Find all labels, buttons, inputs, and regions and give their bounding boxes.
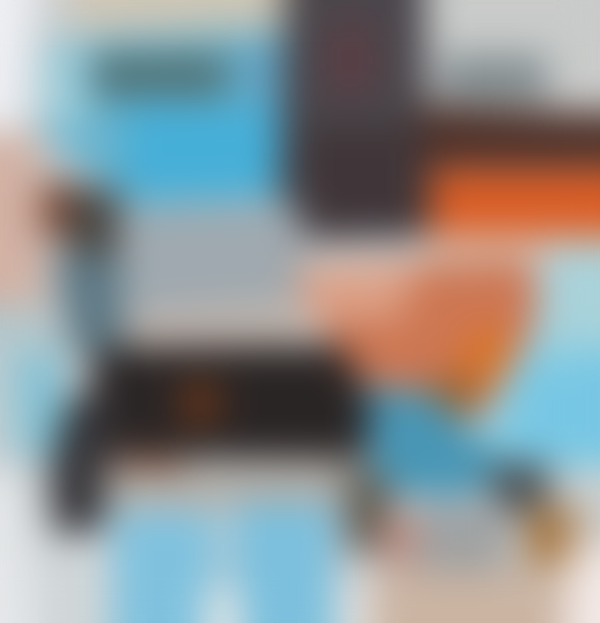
panel: right light blue: [470, 245, 600, 475]
header band: [70, 0, 285, 30]
panel: teal block: [368, 385, 528, 498]
panel: left blue: [0, 305, 72, 460]
panel: salmon orange: [292, 258, 540, 420]
panel: lower blue columns: [105, 465, 395, 623]
panel: left brown block: [0, 130, 128, 355]
panel: black block: [48, 345, 372, 535]
panel: dark and orange bands: [420, 104, 600, 252]
panel: upper blue: [40, 30, 300, 208]
panel: top right grey: [432, 0, 600, 101]
page background edges: [0, 0, 110, 623]
panel: dark column: [278, 0, 438, 242]
panel: middle grey: [122, 205, 310, 350]
panel: bottom right block: [335, 462, 600, 623]
